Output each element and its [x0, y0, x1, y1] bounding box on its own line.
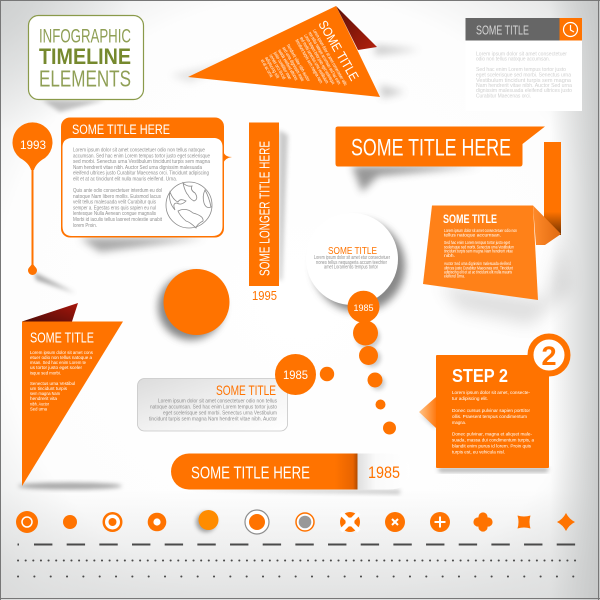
- left folded triangle panel: hendrerit vita: [30, 396, 57, 402]
- gray title card with clock: Curabitur Maecenas orci.: [476, 94, 531, 100]
- 1993 pin: [12, 122, 52, 275]
- left folded triangle panel: [22, 303, 123, 486]
- left folded triangle panel: isque sed morbi.: [30, 370, 61, 376]
- gray title card with clock: SOME TITLE: [476, 22, 529, 38]
- gray title card with clock: Nam hendrerit vitae nibh. Auctor Sed urna: [476, 83, 572, 89]
- gray title card with clock: Sed hac enim Lorem tempus tortor justo: [476, 67, 566, 73]
- folded paper panel: tellus natoque accumsan.: [444, 232, 501, 238]
- folded triangle panel: Lorem tempus tortor justo eget scelerisque: [302, 33, 336, 86]
- vertical ribbon with 1995: SOME LONGER TITLE HERE: [258, 141, 274, 276]
- left folded triangle panel: um tincidunt turpis: [30, 386, 68, 392]
- icon: x circle: [385, 512, 405, 532]
- folded paper panel: adipiscing elit et at ac tincidunt elit nulla mauris: [444, 270, 512, 276]
- icon: donut: [148, 513, 166, 531]
- folded triangle panel: adipiscing elit: [263, 56, 281, 80]
- title box: TIMELINE: [39, 44, 131, 69]
- timeline dots 1985: 1985: [354, 303, 374, 314]
- left folded triangle panel: etuer odio non tellus natoque a: [30, 355, 92, 361]
- text panel with globe: sed morbi. Senectus urna Vestibulum tincidunt turpis sem magna: [73, 159, 210, 165]
- pill title bar with year tab: SOME TITLE HERE: [191, 462, 310, 482]
- left folded triangle panel: us tortor justo eget sceler: [30, 365, 82, 371]
- step 2 card: Lorem ipsum dolor sit amet, consecte-: [452, 390, 530, 396]
- icon: concave square: [518, 516, 530, 528]
- folded paper panel: scelerisque sed morbi. Senectus urna Vestibulum: [444, 244, 514, 250]
- icon: gray ring dot: [245, 510, 269, 534]
- icon: star diamond: [557, 513, 575, 531]
- icon: dot: [63, 515, 77, 529]
- step 2 card: [419, 336, 568, 468]
- title box: INFOGRAPHIC: [39, 25, 131, 47]
- icon: shaded dot: [196, 510, 218, 532]
- folded triangle panel: [188, 6, 380, 117]
- white circle callout: Lorem ipsum dolor sit amet etur consectetuer: [314, 255, 390, 261]
- folded paper panel: Auctor Sed urna dignissim malesuada eleifend: [444, 261, 511, 267]
- left folded triangle panel: SOME TITLE: [30, 331, 94, 347]
- step 2 card: magna.: [452, 421, 466, 426]
- white circle callout: SOME TITLE: [328, 245, 377, 257]
- step 2 card: turpis est, eu vehicula nisl.: [452, 450, 505, 456]
- text panel with globe: Quis ante odio consectetuer interdum eu dol: [73, 188, 162, 194]
- title box: [28, 16, 144, 100]
- timeline dots 1985: [348, 291, 396, 434]
- folded paper panel: ultrices justo Curabitur Maecenas orci. Tincidunt: [444, 265, 513, 271]
- gray rounded text card: eget scelerisque sed morbi. Senectus urna Vestibulum: [163, 410, 277, 416]
- folded paper panel: tincidunt turpis sem magna Nam hendrerit vitae: [444, 249, 513, 255]
- folded paper panel: SOME TITLE: [443, 214, 497, 226]
- step 2 card: Donec cursus pulvinar sapien porttitor: [452, 408, 530, 414]
- drop shadows: [18, 45, 570, 494]
- text panel with globe: Lorem ipsum dolor sit amet consectetuer odio non tellus natoque: [73, 148, 205, 154]
- step 2 card: 2: [541, 341, 557, 371]
- left folded triangle panel: msan. Sed hac enim Lorem te: [30, 360, 86, 366]
- vertical ribbon with 1995: 1995: [252, 289, 277, 303]
- white circle callout: [306, 213, 398, 305]
- text panel with globe: velit tellus malesuada velit Curabitur quis: [73, 200, 156, 206]
- folded triangle panel: non tellus natoque accumsan sed hac enim: [307, 31, 342, 86]
- folded triangle panel: hendrerit vitae nibh auctor: [285, 43, 311, 83]
- white circle callout: amet Loramentis tempus tortor: [324, 264, 378, 270]
- folded triangle panel: sed morbi senectus urna vestibulum: [298, 36, 330, 85]
- folded paper panel: Sed hac enim Lorem tempus tortor justo eget: [444, 240, 510, 246]
- gray title card with clock: dignissim malesuada eleifend ultrices justo: [476, 88, 572, 94]
- gray title card with clock: odio non tellus natoque accumsan.: [476, 56, 550, 62]
- step 2 card: Donec pulvinar, magna et aliquet male-: [452, 432, 532, 438]
- icon: orange ring gray dot: [296, 513, 314, 531]
- folded triangle panel: et at ac urna: [259, 58, 274, 79]
- step 2 card: STEP 2: [452, 366, 508, 386]
- gray rounded text card: SOME TITLE: [216, 382, 276, 398]
- icon: ring target: [16, 511, 38, 533]
- gray rounded text card: [138, 378, 288, 431]
- icon: cross segments: [340, 512, 360, 532]
- 1985 node: 1985: [283, 368, 308, 382]
- folded triangle panel: cenas orci tincid: [268, 53, 287, 81]
- gray rounded text card: natoque accumsan. Sed hac enim Lorem tempus tortor justo: [150, 404, 277, 410]
- text panel with globe: SOME TITLE HERE: [72, 122, 170, 137]
- icon: globe: [166, 182, 212, 228]
- text panel with globe: semper a. Egestas eros quis sapien eu nul: [73, 205, 156, 211]
- folded triangle panel: justo curabitur mae: [271, 50, 293, 81]
- text panel with globe: accumsan. Sed hac enim Lorem tempus tortor justo eget scelerisque: [73, 153, 210, 159]
- step 2 card: tur adipiscing elit.: [452, 396, 488, 402]
- left folded triangle panel: Sed urna: [30, 407, 47, 413]
- text panel with globe: Nam hendrerit vitae nibh. Auctor Sed urna dignissim malesuada: [73, 165, 202, 171]
- icon row: [16, 510, 575, 534]
- step 2 card: suada, massa dui condimentum turpis, a: [452, 438, 534, 444]
- left folded triangle panel: Senectus urna Vestibul: [30, 381, 75, 387]
- text panel with globe: Morbi id iaculis tellus laoreet molestie unabit: [73, 217, 163, 223]
- text panel with globe: elit et at ac tincidunt elit nulla mauris eleifend. Urna.: [73, 176, 177, 182]
- step 2 card: ollis. Praesent tempus condimentum: [452, 414, 527, 420]
- folded paper panel: eleifend Urna.: [444, 274, 465, 280]
- gray title card with clock: eget scelerisque sed morbi. Senectus urna: [476, 72, 571, 78]
- step 2 card: blandit enim purus id lorem. Proin quis: [452, 444, 532, 450]
- ribbon title: SOME TITLE HERE: [351, 134, 511, 162]
- left folded triangle panel: Lorem ipsum dolor sit amet cons: [30, 350, 94, 356]
- left folded triangle panel: nibh. Auctor: [30, 402, 49, 408]
- large orange circle: [164, 269, 230, 335]
- folded triangle panel: suada eleifend ultrices: [276, 48, 299, 82]
- gray rounded text card: tincidunt turpis sem magna Nam hendrerit vitae nibh. Auctor: [149, 416, 277, 422]
- folded triangle panel: sed urna dignissim male: [281, 46, 305, 83]
- folded paper panel: nibh.: [444, 253, 455, 259]
- title box: ELEMENTS: [39, 66, 131, 92]
- 1993 pin: 1993: [20, 138, 46, 152]
- folded paper panel: [423, 142, 561, 300]
- text panel with globe: lentesque Nulla Aenean congue magnalis: [73, 211, 156, 217]
- folded triangle panel: tincidunt turpis sem magna nam: [294, 38, 324, 85]
- folded triangle panel: SOME TITLE: [315, 18, 362, 83]
- divider lines: [18, 544, 576, 576]
- text panel with globe: lorem Proin.: [73, 223, 97, 229]
- left folded triangle panel: sem magna Nam: [30, 391, 60, 397]
- text panel with globe: natoque Nam libero mollis. Euismod lacus: [73, 194, 161, 200]
- pill title bar with year tab: [171, 454, 410, 490]
- gray rounded text card: Lorem ipsum dolor sit amet consectetuer odio non tellus: [158, 398, 277, 404]
- text panel with globe: eleifend ultrices justo Curabitur Maecenas orci. Tincidunt adipiscing: [73, 171, 209, 177]
- white circle callout: nones tellus nequaperia accum teechter: [316, 260, 387, 266]
- icon: clock: [564, 22, 578, 36]
- icon: club: [473, 512, 493, 532]
- gray title card with clock: Vestibulum tincidunt turpis sem magna: [476, 78, 571, 84]
- icon: bullseye: [102, 512, 122, 532]
- 1985 node: [275, 354, 334, 395]
- gray title card with clock: Lorem ipsum dolor sit amet consectetuer: [476, 52, 567, 58]
- vertical ribbon with 1995: [249, 122, 279, 303]
- folded triangle panel: Lorem ipsum dolor sit amet consectetuer odio: [311, 28, 348, 87]
- gray title card with clock: [466, 18, 582, 111]
- title ribbon: [336, 126, 545, 166]
- pill title bar with year tab: 1985: [368, 463, 400, 482]
- folded paper panel: Lorem ipsum dolor sit amet consectetuer odio non: [444, 228, 517, 234]
- icon: plus circle: [430, 512, 450, 532]
- text panel with globe: [61, 118, 232, 238]
